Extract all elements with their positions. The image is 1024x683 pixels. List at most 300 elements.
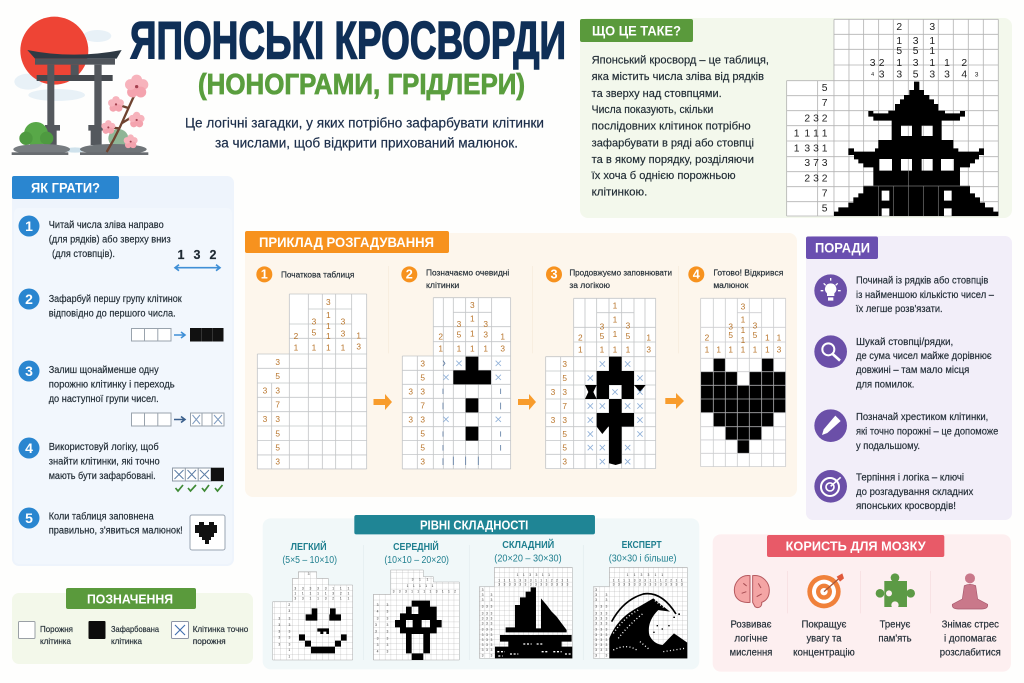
example step 1: 7 <box>275 400 280 410</box>
step 1 <box>18 216 220 271</box>
level: easy: 3 <box>288 609 290 613</box>
example step 3: 1 <box>578 344 583 354</box>
panel: solving example <box>245 231 797 497</box>
example step 1: 3 <box>326 297 331 307</box>
example step 3: 1 <box>613 344 618 354</box>
level: expert: 3 3 3 <box>595 605 607 609</box>
example step 1: 3 <box>312 317 317 327</box>
example step 4: 1 <box>753 344 758 354</box>
level: hard: 3 3 <box>482 593 492 597</box>
legend: empty cell <box>18 622 73 646</box>
legend: crossed cell: порожня <box>193 636 226 646</box>
level: easy: 3 3 <box>278 616 290 620</box>
example step 3: 5 <box>562 429 567 439</box>
example step 3: 3 <box>551 387 556 397</box>
level: hard <box>479 539 572 658</box>
level: hard: (20×20 – 30×30) <box>494 553 562 564</box>
step 2 <box>18 288 224 342</box>
level: medium: 3 3 3 1 1 1 1 3 1 1 2 <box>393 590 456 594</box>
example step 3: 3 <box>551 415 556 425</box>
step 1: 2 <box>210 248 217 262</box>
tip 4: японських кросвордів! <box>856 501 956 512</box>
pagoda clues: 2 <box>896 22 902 33</box>
example step 2: 7 <box>420 400 425 410</box>
pagoda clues: 3 <box>813 143 819 154</box>
benefit: relax: Знімає стрес <box>942 619 999 630</box>
example step 2: Позначаємо очевидні <box>426 268 509 278</box>
example step 4: 1 <box>741 344 746 354</box>
benefit: logic: логічне <box>734 633 768 644</box>
example step 1: 1 <box>326 321 331 331</box>
example step 4: 1 <box>765 344 770 354</box>
example step 1: Початкова таблиця <box>281 269 355 279</box>
example step 1: 3 <box>275 385 280 395</box>
level: expert: 3 3 3 <box>595 611 607 615</box>
pagoda clues: 4 <box>961 69 967 80</box>
step 4: знайти клітинки, які точно <box>49 456 160 468</box>
pagoda clues: 4 <box>871 72 874 78</box>
heading: solving example <box>245 231 449 253</box>
example step 3: за логікою <box>569 280 610 290</box>
intro text: за числами, щоб відкрити прихований малюнок. <box>215 136 518 150</box>
pagoda clues: 1 <box>929 58 935 69</box>
level: easy: 1 <box>288 655 290 659</box>
tip 4 <box>814 470 973 512</box>
pagoda clues: 3 <box>879 69 885 80</box>
example step 1: 3 <box>341 317 346 327</box>
level: expert: 3 3 3 <box>595 648 607 652</box>
level: hard: 3 3 3 3 3 3 3 3 3 3 3 3 3 3 <box>498 583 568 587</box>
tip 3: які точно порожні – це допоможе <box>856 426 999 437</box>
example step 1: 2 <box>294 331 299 341</box>
legend: filled cell <box>88 621 159 646</box>
definition text: та в якому порядку, розділяючи <box>592 154 754 166</box>
pagoda clues: 1 <box>896 36 902 47</box>
level: hard: 3 3 3 <box>482 643 492 647</box>
example step 3: 3 <box>562 457 567 467</box>
level: medium <box>373 541 459 660</box>
step 2: 2 <box>25 291 33 307</box>
example step 3: 5 <box>600 331 605 341</box>
example step 3: 3 <box>550 267 558 281</box>
level: expert: 3 <box>595 588 597 592</box>
level: expert: (30×30 і більше) <box>609 553 676 564</box>
level: hard: 1 1 1 1 3 3 3 1 1 1 2 2 1 1 <box>498 579 568 583</box>
level: expert: ЕКСПЕРТ <box>622 540 662 551</box>
step 1: 1 <box>25 218 33 234</box>
level: hard: 3 3 3 <box>482 638 492 642</box>
example step 1: 1 <box>356 330 361 340</box>
pagoda clues: 3 <box>813 113 819 124</box>
level: easy: 3 3 <box>278 636 290 640</box>
level: medium: 4 3 <box>377 610 388 614</box>
heading: difficulty levels <box>354 515 595 534</box>
step 2: відповідно до першого числа. <box>49 308 176 320</box>
heading: tips: ПОРАДИ <box>815 240 870 256</box>
pagoda clues: 2 <box>804 113 810 124</box>
level: easy: 1 1 1 1 1 3 2 1 <box>294 591 349 595</box>
level: expert: 3 3 3 <box>595 616 607 620</box>
example step 1: 3 <box>275 414 280 424</box>
level: expert: 3 3 <box>595 654 607 658</box>
heading: what is it: ЩО ЦЕ ТАКЕ? <box>592 24 681 38</box>
example step 3: 1 <box>613 301 618 311</box>
pagoda clues: 3 <box>975 71 979 78</box>
example step 4: 1 <box>741 314 746 324</box>
panel: difficulty levels <box>263 515 699 669</box>
example step 1: 3 <box>275 457 280 467</box>
level: expert: 3 3 3 <box>595 621 607 625</box>
pagoda clues: 7 <box>822 98 828 109</box>
example step 1: 1 <box>326 310 331 320</box>
example step 3: 1 <box>646 332 651 342</box>
pagoda clues: 2 <box>961 58 967 69</box>
example step 1: 3 <box>356 342 361 352</box>
tip 2: для помилок. <box>856 379 914 390</box>
example step 2: 3 <box>483 319 488 329</box>
panel: how to play <box>12 176 234 566</box>
level: hard: 3 <box>482 588 484 592</box>
example step 4: 3 <box>741 302 746 312</box>
example step 4: 3 <box>728 322 733 332</box>
example step 3: 3 <box>562 415 567 425</box>
example step 2: 5 <box>420 373 425 383</box>
step 3: порожню клітинку і переходь <box>49 380 175 390</box>
example step 2: 5 <box>457 329 462 339</box>
tip 2: довжині – там мало місця <box>856 365 969 376</box>
level: medium: 3 3 <box>377 636 388 640</box>
level: expert: 3 3 <box>595 593 607 597</box>
example step 4: Готово! Відкрився <box>713 268 784 278</box>
tip 2: де сума чисел майже дорівнює <box>856 351 992 362</box>
example step 4: 1 <box>741 335 746 345</box>
benefit: focus: увагу та <box>806 633 842 644</box>
example step 3: 3 <box>562 387 567 397</box>
illustration: torii gate with sun and sakura <box>12 17 148 155</box>
example step 1: 3 <box>263 385 268 395</box>
benefit: focus <box>793 573 855 658</box>
heading: brain benefits: КОРИСТЬ ДЛЯ МОЗКУ <box>786 538 927 553</box>
pagoda clues: 1 <box>944 58 950 69</box>
legend: empty cell: Порожня <box>40 624 73 634</box>
example step 1: 3 <box>275 357 280 367</box>
pagoda nonogram <box>787 19 998 216</box>
example step 1: 1 <box>326 331 331 341</box>
example step 3 <box>532 266 672 469</box>
legend: empty cell: клітинка <box>40 636 71 646</box>
tip 2: Шукай стовпці/рядки, <box>856 337 953 348</box>
example step 2: 1 <box>438 344 443 354</box>
pagoda clues: 3 <box>870 58 876 69</box>
pagoda clues: 3 <box>913 36 919 47</box>
definition text: їх хоча б однією порожньою <box>591 170 736 182</box>
step 3: 3 <box>25 363 33 379</box>
example step 4: 1 <box>728 344 733 354</box>
pagoda clues: 3 <box>804 143 810 154</box>
level: easy: 3 3 <box>278 642 290 646</box>
example step 2: 2 <box>406 267 413 281</box>
level: easy: ЛЕГКИЙ <box>291 541 327 553</box>
arrow: step 1 to 2 <box>374 394 392 410</box>
level: hard: 3 3 3 <box>482 648 492 652</box>
example step 2: 1 <box>483 344 488 354</box>
heading: tips <box>806 236 878 259</box>
benefit: logic: мислення <box>730 647 772 658</box>
level: hard: 1 1 3 3 1 1 <box>517 573 550 577</box>
benefit: relax: і допомагає <box>944 633 997 644</box>
step 1: 1 <box>178 248 185 262</box>
pagoda clues: 1 <box>822 143 828 154</box>
pagoda clues: 5 <box>822 83 828 94</box>
example step 3: 1 <box>600 344 605 354</box>
pagoda clues: 1 <box>804 128 810 139</box>
example step 2: 1 <box>500 332 505 342</box>
step 4: 4 <box>25 440 33 456</box>
benefit: memory: пам'ять <box>878 633 912 644</box>
definition text: клітинкою. <box>592 187 647 199</box>
level: expert: 3 3 3 <box>595 633 607 637</box>
benefit: relax <box>940 573 1001 658</box>
level: medium: 4 3 <box>377 650 388 654</box>
step 1: (для рядків) або зверху вниз <box>49 234 171 246</box>
example step 2: 3 <box>420 386 425 396</box>
example step 1: 1 <box>312 342 317 352</box>
panel: what is it <box>580 18 1012 218</box>
example step 2: 3 <box>420 358 425 368</box>
benefit: logic: Розвиває <box>730 619 771 630</box>
pagoda clues: 5 <box>913 46 919 57</box>
pagoda clues: 1 <box>929 46 935 57</box>
benefit: memory: Тренує <box>880 619 910 630</box>
example step 1: 5 <box>275 428 280 438</box>
pagoda clues: 2 <box>822 113 828 124</box>
level: medium: 3 3 <box>375 623 388 627</box>
level: medium: 3 3 <box>377 616 388 620</box>
example step 3: 2 <box>578 332 583 342</box>
example step 4: 1 <box>765 332 770 342</box>
level: easy: 3 3 3 3 3 1 1 1 <box>294 586 349 590</box>
step 5: Коли таблиця заповнена <box>49 510 154 522</box>
heading: legend: ПОЗНАЧЕННЯ <box>87 592 173 606</box>
legend: filled cell: клітинка <box>111 636 142 646</box>
legend: crossed cell <box>172 622 249 646</box>
level: easy: (5×5 – 10×10) <box>282 555 337 566</box>
example step 1: 3 <box>341 328 346 338</box>
definition text: послідовних клітинок потрібно <box>592 121 751 133</box>
level: hard: 3 3 <box>482 654 492 658</box>
tip 3: Позначай хрестиком клітинки, <box>856 412 988 423</box>
tip 1: Починай із рядків або стовпців <box>856 274 988 286</box>
level: medium: 3 1 1 <box>412 577 428 581</box>
pagoda clues: 5 <box>822 203 828 214</box>
heading: solving example: ПРИКЛАД РОЗГАДУВАННЯ <box>259 234 434 250</box>
pagoda clues: 1 <box>896 58 902 69</box>
example step 2: 3 <box>457 319 462 329</box>
example step 1: 1 <box>261 267 268 281</box>
example step 3: 1 <box>626 344 631 354</box>
level: expert: 1 1 1 1 3 3 3 1 1 1 2 2 1 1 <box>613 579 683 583</box>
level: expert <box>593 540 687 658</box>
legend: crossed cell: Клітинка точно <box>193 624 249 634</box>
panel: brain benefits <box>713 534 1011 672</box>
benefit: relax: розслабитися <box>940 646 1001 658</box>
example step 4: 4 <box>693 267 700 281</box>
level: medium: 3 3 <box>377 603 388 607</box>
level: hard: 3 3 3 <box>482 621 492 625</box>
example step 1: 5 <box>275 371 280 381</box>
example step 3: 5 <box>626 331 631 341</box>
subtitle: (НОНОГРАМИ, ГРІДЛЕРИ) <box>198 69 525 101</box>
example step 2 <box>388 266 511 469</box>
level: expert: 3 3 3 <box>595 627 607 631</box>
level: hard: 3 3 3 <box>482 627 492 631</box>
pagoda clues: 2 <box>879 58 885 69</box>
example step 4: 3 <box>753 321 758 331</box>
pagoda clues: 1 <box>822 128 828 139</box>
example step 2: 3 <box>483 329 488 339</box>
example step 2: 5 <box>420 429 425 439</box>
example step 4: 1 <box>716 344 721 354</box>
tip 1: із найменшою кількістю чисел – <box>856 290 994 301</box>
level: easy: 2 <box>288 603 290 607</box>
arrow: step 2 to 3 <box>518 394 536 410</box>
example step 1 <box>256 266 367 469</box>
tip 4: до розгадування складних <box>856 487 973 498</box>
level: hard: 3 3 3 <box>482 633 492 637</box>
level: medium: 3 3 <box>377 643 388 647</box>
example step 1: 1 <box>341 342 346 352</box>
example step 3: 5 <box>562 443 567 453</box>
example step 2: 3 <box>420 457 425 467</box>
step 5: правильно, з'явиться малюнок! <box>49 526 183 536</box>
pagoda clues: 1 <box>794 143 800 154</box>
example step 4: 3 <box>777 344 782 354</box>
pagoda clues: 3 <box>929 69 935 80</box>
step 3 <box>18 360 224 426</box>
tip 2 <box>814 335 992 390</box>
tip 3: у подальшому. <box>856 441 920 452</box>
heading: difficulty levels: РІВНІ СКЛАДНОСТІ <box>420 518 528 532</box>
pagoda clues: 3 <box>913 58 919 69</box>
pagoda clues: 1 <box>794 128 800 139</box>
level: expert: 3 3 <box>595 598 607 602</box>
example step 3: 5 <box>562 373 567 383</box>
level: easy: 3 <box>308 572 310 576</box>
step 4: мають бути зафарбовані. <box>49 470 156 482</box>
example step 2: 1 <box>470 328 475 338</box>
example step 1: 1 <box>326 342 331 352</box>
heading: how to play: ЯК ГРАТИ? <box>31 180 100 196</box>
example step 3: 3 <box>646 344 651 354</box>
step 3: до наступної групи чисел. <box>49 394 159 405</box>
example step 4: 2 <box>705 332 710 342</box>
example step 4 <box>678 266 786 467</box>
pagoda clues: 5 <box>913 69 919 80</box>
definition text <box>591 55 769 199</box>
example step 3: 1 <box>613 314 618 324</box>
legend: filled cell: Зафарбована <box>111 624 159 634</box>
level: easy: 1 <box>288 648 290 652</box>
example step 2: 3 <box>500 344 505 354</box>
step 1: 3 <box>194 248 201 262</box>
arrow: step 3 to 4 <box>665 393 684 409</box>
tip 4: Терпіння і логіка – ключі <box>856 472 964 483</box>
benefit: focus: концентрацію <box>793 647 855 658</box>
heading: how to play <box>12 176 119 199</box>
level: hard: 3 3 3 <box>482 616 492 620</box>
example step 2: 1 <box>457 344 462 354</box>
definition text: Японський кросворд – це таблиця, <box>592 55 769 67</box>
level: easy: 3 3 <box>278 623 290 627</box>
panel: tips <box>806 236 1012 520</box>
example step 1: 1 <box>294 342 299 352</box>
pagoda clues: 7 <box>822 188 828 199</box>
example step 4: 5 <box>753 330 758 340</box>
example step 4: 1 <box>777 332 782 342</box>
example step 3: 3 <box>562 359 567 369</box>
tip 1: їх легше розв'язати. <box>855 304 943 315</box>
heading: legend <box>66 588 196 609</box>
pagoda clues <box>794 22 979 214</box>
level: hard: СКЛАДНИЙ <box>502 539 554 551</box>
example step 1: 5 <box>275 442 280 452</box>
step 4 <box>18 438 224 491</box>
tip 1 <box>814 274 994 315</box>
example step 3: 1 <box>613 329 618 339</box>
example step 2: 1 <box>470 344 475 354</box>
pagoda clues: 3 <box>929 22 935 33</box>
pagoda clues: 2 <box>804 173 810 184</box>
definition text: та зверху над стовпцями. <box>592 88 722 100</box>
definition text: зафарбувати в ряді або стовпці <box>592 137 754 149</box>
level: expert: 3 3 3 <box>595 643 607 647</box>
example step 2: 1 <box>470 314 475 324</box>
example step 2: клітинки <box>426 280 459 290</box>
example step 4: 1 <box>741 325 746 335</box>
definition text: Числа показують, скільки <box>592 104 713 116</box>
title: ЯПОНСЬКІ КРОСВОРДИ <box>130 12 566 70</box>
step 1: (для стовпців). <box>52 249 115 260</box>
level: medium: 1 1 1 1 1 <box>407 584 433 588</box>
example step 2: 5 <box>420 443 425 453</box>
pagoda clues: 7 <box>813 158 819 169</box>
level: expert: 3 3 3 3 3 3 3 3 3 3 3 3 3 3 <box>613 583 683 587</box>
step 1: Читай числа зліва направо <box>49 220 164 231</box>
tip 3 <box>814 409 999 452</box>
example step 2: 2 <box>438 332 443 342</box>
pagoda clues: 2 <box>822 173 828 184</box>
example step 1: 5 <box>312 327 317 337</box>
step 5: 5 <box>25 510 33 526</box>
heading: what is it <box>580 19 693 42</box>
pagoda clues: 1 <box>813 128 819 139</box>
example step 4: 5 <box>728 330 733 340</box>
example step 2: 3 <box>470 300 475 310</box>
step 2: Зафарбуй першу групу клітинок <box>49 293 182 305</box>
pagoda clues: 3 <box>804 158 810 169</box>
benefit: logic <box>730 576 772 658</box>
level: easy: 3 3 1 1 3 2 1 1 <box>294 596 349 600</box>
definition text: яка містить числа зліва від рядків <box>592 71 764 83</box>
pagoda clues: 3 <box>813 173 819 184</box>
pagoda clues: 5 <box>896 46 902 57</box>
pagoda clues: 3 <box>944 69 950 80</box>
level: easy: 3 3 <box>278 630 290 634</box>
panel: legend <box>12 588 253 664</box>
step 3: Залиш щонайменше одну <box>49 365 159 376</box>
benefit: focus: Покращує <box>801 619 846 630</box>
example step 2: 3 <box>408 386 413 396</box>
